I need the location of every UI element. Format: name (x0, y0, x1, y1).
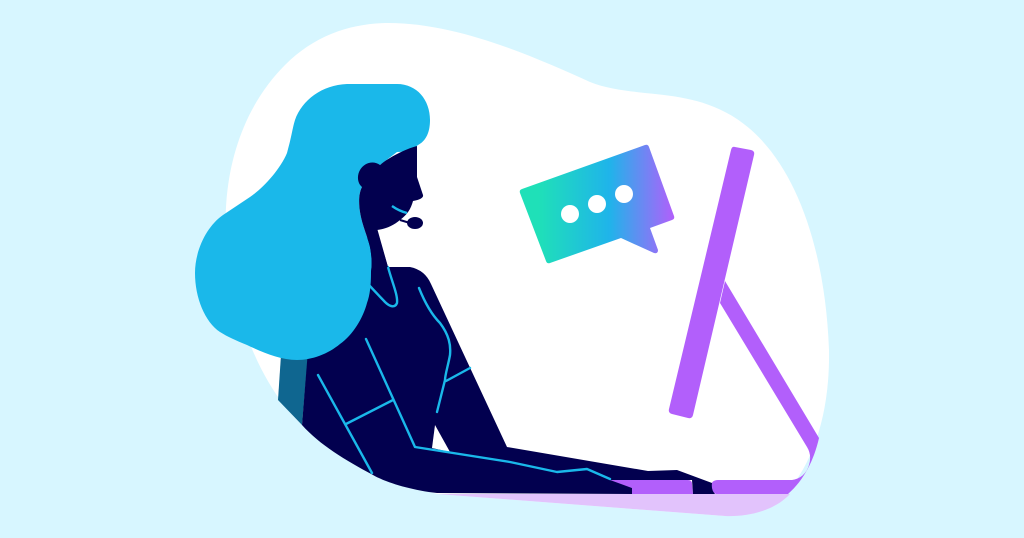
head and neck (358, 146, 423, 272)
gap between arm and torso (432, 425, 450, 452)
headset boom (392, 206, 407, 213)
bust seam (419, 288, 470, 412)
headset (392, 206, 423, 229)
agent body (302, 228, 715, 494)
collar (368, 267, 397, 306)
monitor stand and base (711, 281, 819, 494)
monitor screen (669, 147, 754, 418)
side seam (318, 375, 372, 473)
chair back (278, 355, 308, 425)
chat bubble icon (520, 145, 674, 263)
sleeve and arm seam (366, 339, 610, 479)
lavender desk shadow (437, 494, 790, 516)
typing dots (561, 185, 633, 223)
keyboard (608, 480, 693, 494)
monitor (669, 147, 819, 494)
cross seam (346, 400, 393, 424)
clothing lines (318, 267, 610, 479)
microphone (407, 217, 423, 229)
white blob (226, 23, 829, 516)
hair (195, 84, 430, 360)
